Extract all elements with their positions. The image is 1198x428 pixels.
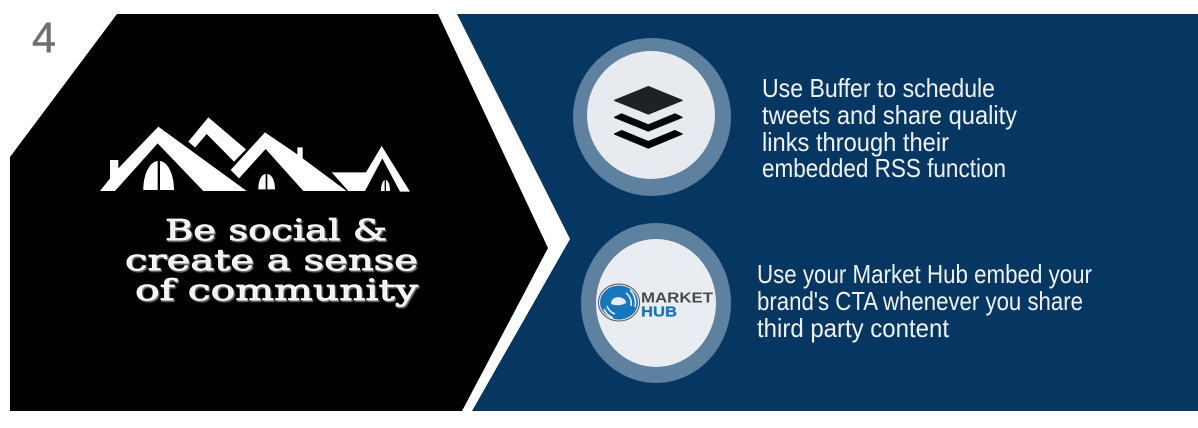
text: market hub tip: Use your Market Hub embed your [757, 259, 1092, 289]
icon: market hub logo: MARKET [641, 290, 713, 306]
icon: buffer circle [573, 38, 731, 196]
text: market hub tip: third party content [757, 313, 950, 343]
text: buffer tip [762, 73, 1017, 183]
heading: be social [125, 213, 419, 307]
heading: be social: of community [135, 273, 419, 307]
text: market hub tip: brand's CTA whenever you share [757, 286, 1083, 316]
heading: be social: Be social & [165, 213, 387, 247]
heading: be social: create a sense [125, 243, 418, 277]
text: buffer tip: tweets and share quality [762, 100, 1017, 130]
text: buffer tip: embedded RSS function [762, 153, 1006, 183]
icon: market hub logo [598, 284, 713, 321]
icon: market hub logo: HUB [641, 304, 677, 320]
icon: buffer layers [615, 87, 682, 148]
icon: rooftops [100, 117, 410, 192]
panel: black hexagon [10, 14, 548, 411]
icon: market hub circle [581, 223, 731, 383]
text: buffer tip: links through their [762, 127, 949, 157]
text: market hub tip [757, 259, 1092, 343]
panel: blue chevron [457, 14, 1198, 411]
text: buffer tip: Use Buffer to schedule [762, 73, 995, 103]
step number: 4 [32, 14, 56, 62]
